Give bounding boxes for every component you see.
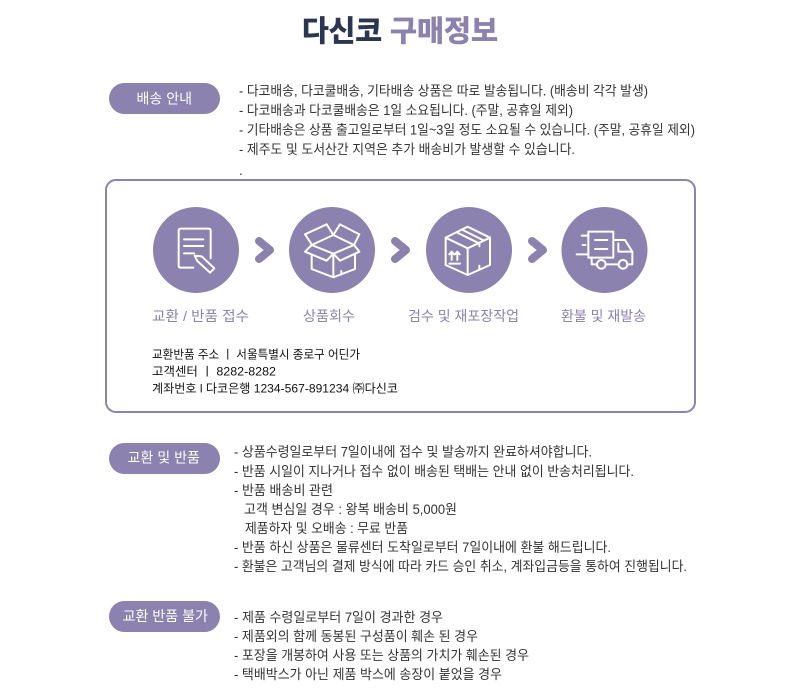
text block: exchange and return: 제품하자 및 오배송 : 무료 반품 <box>245 521 408 536</box>
text block: shipping info: . <box>239 163 243 178</box>
text block: shipping info: - 제주도 및 도서산간 지역은 추가 배송비가 발생할 수 있습니다. <box>239 142 575 157</box>
pill: shipping info: 배송 안내 <box>136 90 192 106</box>
step 1 icon: document and pencil <box>153 207 239 293</box>
text block: shipping info: - 다코배송, 다코쿨배송, 기타배송 상품은 따로 발송됩니다. (배송비 각각 발생) <box>239 84 648 98</box>
panel: exchange and return process <box>106 180 695 412</box>
pill: exchange and return: 교환 및 반품 <box>128 450 200 466</box>
text block: non-returnable: - 제품 수령일로부터 7일이 경과한 경우 <box>234 610 443 625</box>
text block: non-returnable: - 제품외의 함께 동봉된 구성품이 훼손 된 경우 <box>234 629 478 644</box>
pill: non-returnable <box>109 601 220 632</box>
title: 다신코 <box>302 15 382 48</box>
arrow 3 <box>532 241 543 259</box>
arrow 2 <box>395 241 406 259</box>
arrow 1 <box>259 241 270 259</box>
text block: non-returnable: - 택배박스가 아닌 제품 박스에 송장이 붙었을 경우 <box>234 667 502 682</box>
text block: exchange and return: - 반품 하신 상품은 물류센터 도착일로부터 7일이내에 환불 해드립니다. <box>234 540 611 555</box>
text block: exchange and return: 고객 변심일 경우 : 왕복 배송비 5,000원 <box>244 502 457 517</box>
contact details: 계좌번호 l 다코은행 1234-567-891234 ㈜다신코 <box>152 380 398 396</box>
step labels: 환불 및 재발송 <box>561 308 646 324</box>
text block: exchange and return: - 반품 시일이 지나거나 접수 없이 배송된 택배는 안내 없이 반송처리됩니다. <box>234 464 634 479</box>
step labels <box>152 308 646 324</box>
pill: non-returnable: 교환 반품 불가 <box>122 608 208 624</box>
text block: exchange and return: - 반품 배송비 관련 <box>234 483 333 498</box>
text block: shipping info: - 기타배송은 상품 출고일로부터 1일~3일 정도 소요될 수 있습니다. (주말, 공휴일 제외) <box>239 122 695 138</box>
text block: exchange and return: - 상품수령일로부터 7일이내에 접수 및 발송까지 완료하셔야합니다. <box>234 444 592 460</box>
text block: exchange and return: - 환불은 고객님의 결제 방식에 따라 카드 승인 취소, 계좌입금등을 통하여 진행됩니다. <box>234 559 687 574</box>
pill: exchange and return <box>109 443 220 474</box>
text block: non-returnable <box>234 610 529 682</box>
contact details: 교환반품 주소 ㅣ 서울특별시 종로구 어딘가 <box>152 348 360 362</box>
text block: shipping info <box>239 84 695 178</box>
text block: non-returnable: - 포장을 개봉하여 사용 또는 상품의 가치가 훼손된 경우 <box>234 648 529 663</box>
title <box>302 15 498 48</box>
step labels: 교환 / 반품 접수 <box>152 308 249 324</box>
step 4 icon: delivery truck <box>562 207 648 293</box>
contact details: 고객센터 ㅣ 8282-8282 <box>152 364 276 378</box>
step labels: 상품회수 <box>303 308 355 324</box>
step 3 icon: sealed box <box>426 207 512 293</box>
step labels: 검수 및 재포장작업 <box>408 308 519 324</box>
text block: shipping info: - 다코배송과 다코쿨배송은 1일 소요됩니다. (주말, 공휴일 제외) <box>239 103 573 118</box>
contact details <box>152 348 398 396</box>
text block: exchange and return <box>234 444 687 574</box>
pill: shipping info <box>109 83 220 114</box>
title: 구매정보 <box>390 15 498 48</box>
step 2 icon: open box <box>289 207 375 293</box>
